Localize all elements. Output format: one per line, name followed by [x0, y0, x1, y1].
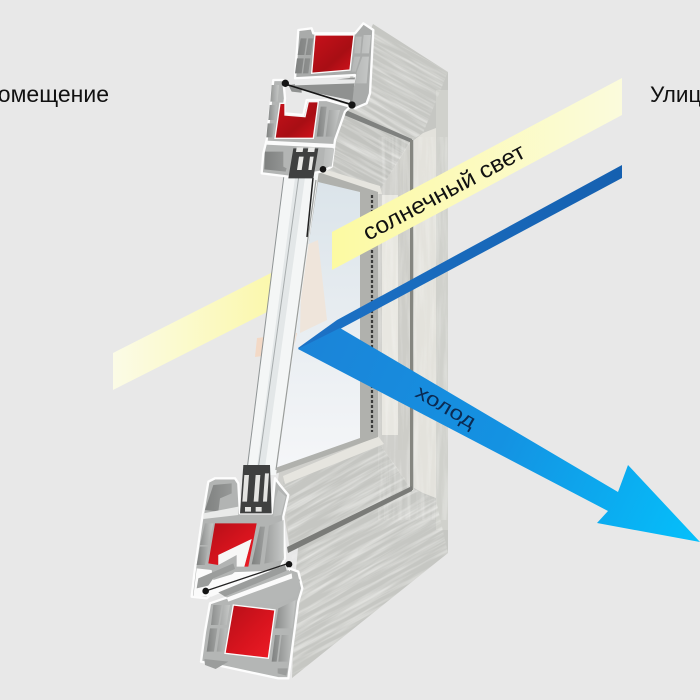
bottom frame: left foot [204, 659, 228, 669]
top frame: rebate ribs [295, 79, 355, 103]
frame: outer body [292, 24, 448, 678]
top frame: rebate [288, 77, 355, 103]
gasket: upper dots [282, 80, 356, 173]
sash: lower groove [287, 486, 412, 553]
glazing: right edge [276, 180, 316, 470]
bottom frame: upper rail [225, 570, 300, 605]
label: sunlight: солнечный свет [358, 138, 530, 245]
bottom sash section [192, 465, 288, 598]
bottom frame: left chambers [207, 605, 230, 652]
top sash: lower wall [266, 141, 334, 148]
glazing: middle line [258, 175, 299, 470]
wood grain: sides [378, 137, 448, 520]
glazing: dark upper line [307, 178, 313, 237]
top frame section [288, 23, 373, 108]
bottom rebate [193, 561, 292, 597]
arrow: cold [298, 328, 700, 542]
bottom frame: right foot [278, 668, 288, 676]
sash: bottom face [283, 442, 410, 550]
bottom sash: inner white piece [218, 539, 252, 567]
top sash: right chambers [317, 107, 340, 137]
glazing: panes [247, 170, 319, 475]
seal dashes [371, 195, 373, 432]
rebate: body [193, 565, 287, 597]
bottom sash: right chambers [252, 520, 284, 564]
wood grain: top faces [328, 34, 446, 184]
top sash section [262, 80, 350, 178]
wood grain: bottom faces [284, 449, 448, 670]
sash: right stile shade [398, 150, 410, 450]
bottom sash: spacer highlights [242, 473, 269, 512]
label: cold: холод [412, 381, 480, 434]
bottom frame section [201, 568, 302, 678]
sash: top face [320, 112, 410, 190]
top sash: glazing spacer [288, 148, 318, 178]
top frame: profile [295, 23, 373, 108]
rebate: gasket dots [202, 561, 292, 594]
glazing: left edge [247, 175, 284, 470]
bottom frame: steel reinforcement [225, 605, 275, 658]
top sash: spacer highlights [296, 147, 315, 170]
sash: inner highlight top [320, 168, 382, 194]
beam: sunlight upper part [332, 78, 622, 270]
frame: right molding [414, 128, 436, 498]
beam: deep blue [298, 165, 622, 350]
glazing unit [247, 170, 319, 475]
bottom sash: profile [192, 478, 288, 598]
glazing: pane shade [256, 170, 306, 475]
top sash: steel reinforcement [275, 102, 318, 138]
rebate: ribs [197, 563, 287, 597]
bottom sash: glazing spacer [240, 465, 272, 513]
top sash: bead chambers [264, 148, 334, 172]
rebate: gasket line [206, 563, 288, 591]
bottom sash: steel reinforcement [208, 523, 257, 567]
top sash: profile [262, 80, 350, 177]
top frame: chambers [295, 35, 371, 83]
sash: right stile highlight [382, 195, 398, 435]
window frame with wood texture [275, 1, 453, 680]
frame: right outer strip [436, 90, 448, 530]
seal channel [275, 172, 378, 474]
sash: right dark line [410, 140, 413, 490]
faded light through glass [300, 240, 327, 333]
bottom sash: bead rib [203, 507, 238, 519]
gasket: upper line [285, 84, 352, 105]
gaskets [282, 80, 356, 173]
bottom frame: right chambers [272, 600, 296, 662]
top frame: steel reinforcement [312, 35, 354, 73]
beam: sunlight inner part [255, 333, 297, 357]
bottom frame: upper rail ribs [227, 573, 292, 602]
glass pane [275, 182, 360, 468]
top sash: left chambers [266, 85, 279, 137]
bottom sash: left chambers [197, 523, 213, 565]
sash: top shadow groove [344, 110, 412, 143]
sash face [278, 108, 412, 550]
bottom sash: bead chambers [205, 483, 286, 517]
beam: sunlight left part [113, 272, 273, 390]
sash: bottom inner highlight [283, 436, 384, 484]
bottom frame: profile [201, 568, 302, 678]
